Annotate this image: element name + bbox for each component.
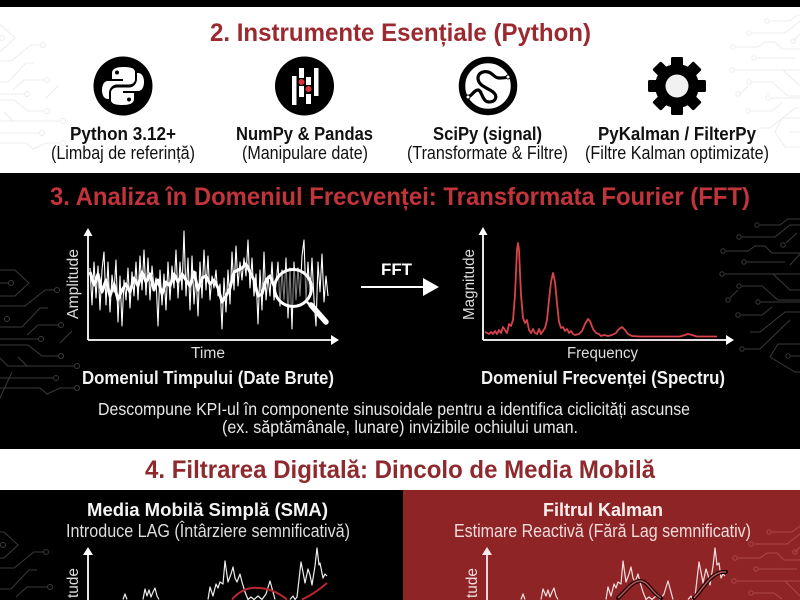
icon: python [94,56,152,116]
tool labels: Python 3.12+ [70,124,176,144]
panel: essential tools [0,7,800,173]
axis [486,553,488,600]
heading: section 3: 3. Analiza în Domeniul Frecvenței: Transformata Fourier (FFT) [50,183,750,211]
tool labels: (Manipulare date) [242,143,368,163]
heading: SMA: Media Mobilă Simplă (SMA) [87,500,328,520]
icon: gear [648,57,706,115]
subheading: Kalman: Estimare Reactivă (Fără Lag semnificativ) [454,521,751,541]
tool labels: SciPy (signal) [433,124,542,144]
axis [87,553,89,600]
heading: Kalman: Filtrul Kalman [543,500,663,520]
axes [88,232,334,340]
subheading: SMA: Introduce LAG (Întârziere semnificativă) [66,521,350,541]
chart: Kalman [464,547,726,600]
arrow: FFT: FFT [381,260,413,279]
description text: (ex. săptămânale, lunare) invizibile ochiului uman. [222,417,578,437]
description text: Descompune KPI-ul în componente sinusoidale pentru a identifica ciclicități ascunse [98,399,690,419]
panel: frequency analysis [0,173,800,449]
chart: frequency spectrum: Magnitude [461,249,478,320]
tool labels [51,124,769,163]
arrow: FFT [361,260,439,296]
chart: Kalman: tude [464,568,481,598]
tool labels: (Limbaj de referință) [51,143,195,163]
panel: digital filtering heading band [0,449,800,490]
chart: time domain signal: Amplitude [65,249,82,319]
tool labels: (Filtre Kalman optimizate) [585,143,769,163]
panel: simple moving average [0,490,398,600]
chart: SMA [65,547,327,600]
icon: magnifier [274,270,326,322]
description text [98,399,690,437]
chart: frequency spectrum: Frequency [567,345,638,362]
tool labels: (Transformate & Filtre) [407,143,568,163]
tool labels: PyKalman / FilterPy [598,124,756,144]
chart: time domain signal [65,228,339,362]
label: time domain: Domeniul Timpului (Date Brute) [82,368,334,388]
axes [483,231,729,340]
chart: time domain signal: Time [191,345,225,362]
heading: section 4: 4. Filtrarea Digitală: Dincolo de Media Mobilă [145,456,656,484]
heading: section 2: 2. Instrumente Esențiale (Python) [210,19,591,47]
icon: scipy [462,60,514,112]
icon: numpy and pandas [275,56,334,116]
panel: kalman filter [403,490,800,600]
label: frequency domain: Domeniul Frecvenței (Spectru) [481,368,725,388]
chart: SMA: tude [65,568,82,598]
tool labels: NumPy & Pandas [236,124,373,144]
chart: frequency spectrum [461,227,734,362]
